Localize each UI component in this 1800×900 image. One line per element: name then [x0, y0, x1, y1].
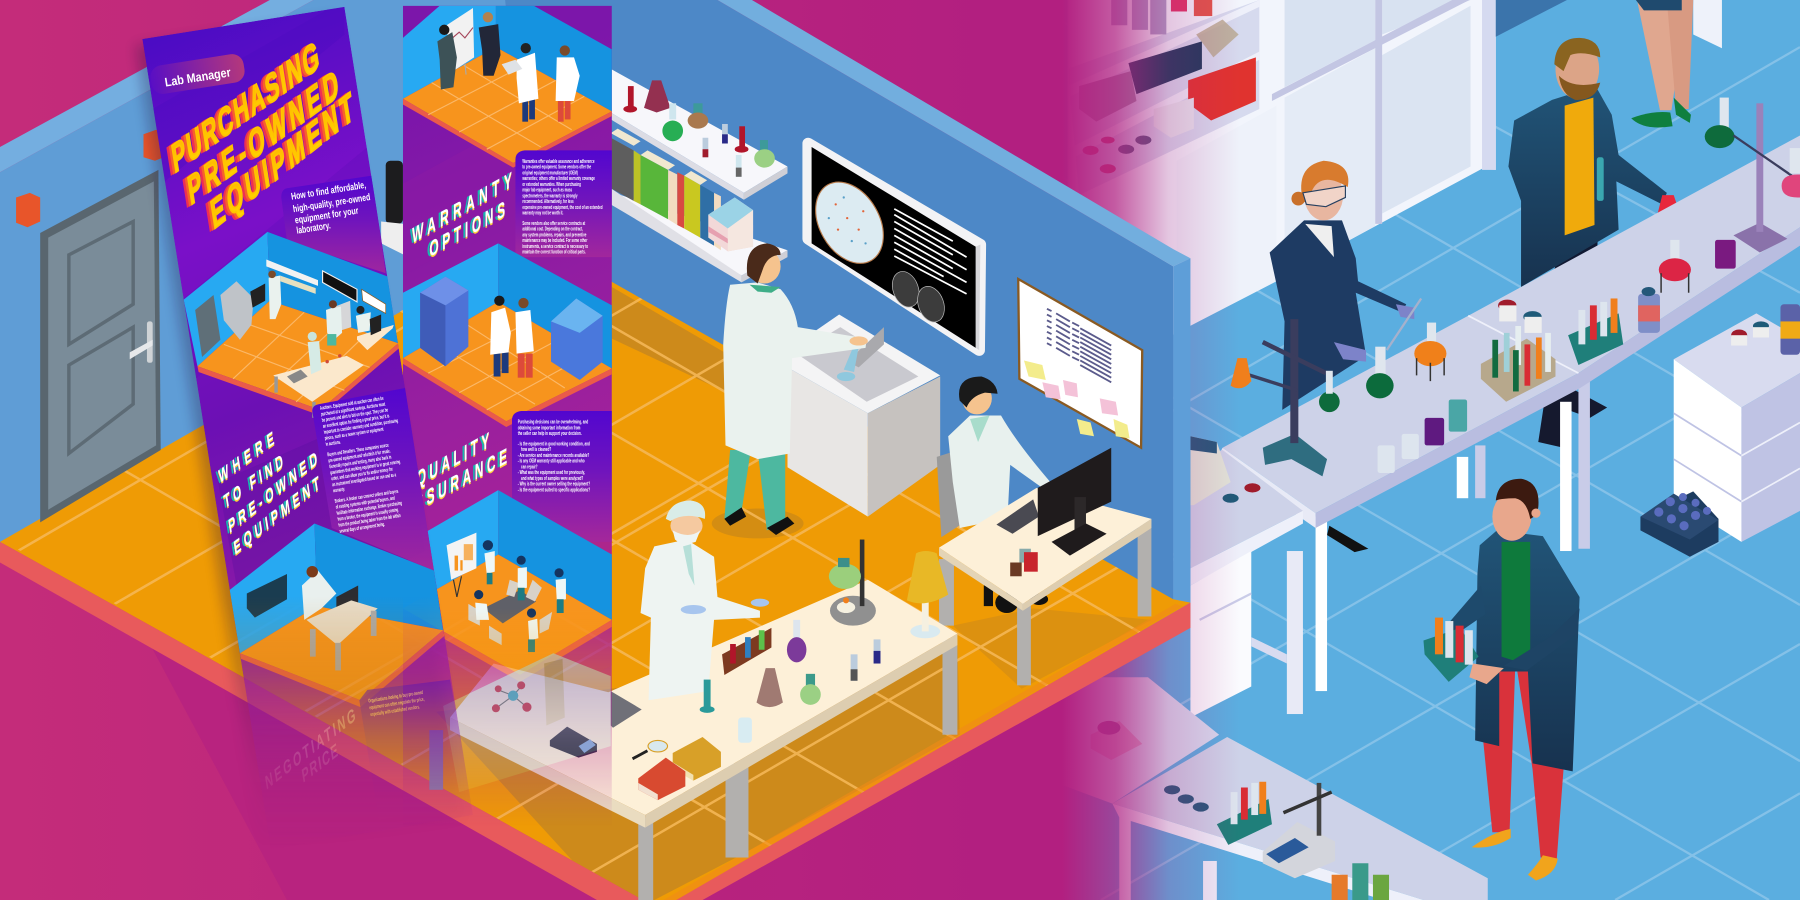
purple ring stand with flasks: [1705, 98, 1800, 253]
left wall ridge: [0, 0, 313, 172]
teal stand: [700, 680, 715, 713]
magnifier: [633, 740, 668, 759]
heading: where to find pre-owned equipment: WHERE: [217, 428, 275, 488]
brochure page two: [401, 6, 612, 855]
panel: quality assurance text: - Is the equipment in good working condition, and: [518, 441, 590, 447]
panel: where to find text: from the product being taken from the lab within: [338, 512, 401, 528]
burner on stand: [829, 540, 876, 626]
panel: quality assurance text: - Is the equipment suited to specific applications?: [518, 486, 590, 493]
panel: quality assurance text: - Are service and maintenance records available?: [518, 452, 590, 458]
panel: warranty text: warranty may not be worth it.: [522, 210, 563, 216]
panel: where to find text: warranty.: [332, 486, 345, 494]
person: foreground man with test tube rack: [1423, 479, 1580, 880]
panel: subtitle: laboratory.: [296, 220, 332, 237]
ring stand with flasks: [1231, 319, 1340, 476]
heading: warranty options: WARRANTY: [412, 168, 512, 250]
heading: where to find pre-owned equipment: PRE-OWNED: [225, 450, 316, 539]
panel: where to find text: Generally repairs and testing, many also back in: [329, 454, 392, 470]
heading: negotiating price: PRICE: [301, 740, 339, 787]
heading: quality assurance: [418, 432, 507, 506]
title: PRE-OWNED: [181, 63, 337, 216]
panel: warranty text: warranties; others offer a limited warranty coverage: [522, 175, 595, 181]
panel: quality assurance text: the seller can help in support your decision.: [518, 430, 582, 436]
heading: warranty options: OPTIONS: [427, 198, 503, 263]
panel: quality assurance text: [512, 411, 612, 542]
heading: negotiating price: NEGOTIATING: [264, 705, 357, 794]
door: [40, 170, 161, 522]
heading: quality assurance: QUALITY: [417, 428, 489, 492]
panel: warranty text: expensive pre-owned equipment, the cost of an extended: [522, 204, 603, 210]
long lab table: [429, 580, 957, 900]
panel: where to find text: purchased at a significant savings. Auctions must: [320, 401, 386, 417]
panel: warranty text: instruments, a service contract is necessary to: [522, 243, 588, 249]
heading: quality assurance: ASSURANCE: [403, 445, 507, 524]
heading: where to find pre-owned equipment: PRE-OWNED: [227, 450, 319, 540]
table glassware: [550, 540, 948, 800]
heading: where to find pre-owned equipment: TO FIND: [223, 451, 284, 513]
left wall: [0, 0, 608, 545]
panel: where to find text: Buyers and Resellers. These companies source: [327, 442, 389, 458]
stacked books: [708, 197, 753, 251]
title: EQUIPMENT: [208, 83, 356, 238]
panel: where to find text: guarantees that working equipment is in great running: [330, 458, 401, 476]
logo pill: [152, 54, 245, 94]
panel: where to find text: an excellent option for finding a great price, but it is: [322, 412, 390, 429]
floor: [0, 282, 1190, 900]
panel: quality assurance text: - Is any OEM warranty still applicable and who: [518, 458, 585, 464]
panel: warranty text: maintenance may be included. For some other: [522, 237, 588, 243]
panel: where to find text: from a broker, the equipment is usually coming: [337, 506, 399, 522]
panel: warranty text: major lab equipment, such as mass: [522, 187, 573, 193]
panel: warranty text: Warranties offer valuable assurance and adherence: [522, 158, 595, 164]
panel: where to find text: pieces, such as a newer system or equipment: [324, 426, 384, 441]
room: storage: [403, 243, 612, 427]
heading: warranty options: WARRANTY: [410, 167, 510, 249]
panel: where to find text: Auctions. Equipment sold at auction can often be: [319, 395, 384, 411]
tube racks on bench: [1481, 326, 1555, 402]
molecule icon: [492, 681, 532, 712]
room: faded lower scene: [443, 653, 611, 792]
floor platform edges: [0, 542, 1190, 900]
heading: warranty options: OPTIONS: [429, 197, 505, 262]
right lab scene: [1033, 0, 1800, 900]
wall end cap: [1173, 258, 1190, 611]
panel: where to find text: in auctions.: [325, 439, 341, 447]
person: woman in navy with goggles: [1270, 161, 1421, 552]
panel: where to find text: be present and alert to bid on the spot. They can be: [321, 406, 389, 423]
purple flask: [787, 620, 806, 662]
heading: warranty options: WARRANTY: [412, 166, 512, 248]
beaker: [738, 717, 752, 743]
panel: warranty text: original equipment manufacturer (OEM): [522, 170, 578, 176]
title: EQUIPMENT: [206, 84, 354, 239]
panel: subtitle: equipment for your: [294, 206, 359, 227]
panel: subtitle: [281, 176, 386, 273]
heading: where to find pre-owned equipment: WHERE: [215, 429, 273, 489]
panel: warranty text: spectrometers, the warranty is strongly: [522, 193, 578, 199]
panel: negotiating text: especially with established vendors.: [370, 703, 420, 717]
panel: negotiating text: Organizations looking to buy pre-owned: [368, 689, 424, 704]
laptop keyboard: [611, 691, 642, 728]
panel: negotiating text: [359, 680, 466, 770]
orange flask on tripod: [1414, 323, 1446, 381]
sink cabinet: [788, 315, 940, 517]
heading: where to find pre-owned equipment: WHERE: [217, 430, 275, 490]
blue lab floor: [1033, 0, 1800, 900]
central isometric room: [0, 0, 1190, 900]
panel: warranty text: to pre-owned equipment. Some vendors offer the: [522, 164, 592, 170]
panel: warranty text: recommended. Alternatively, for less: [522, 198, 574, 204]
back cabinets: [1068, 0, 1722, 390]
panel: warranty text: [515, 150, 612, 257]
green jar: [800, 674, 821, 705]
panel: warranty text: additional cost. Depending on the contract,: [522, 226, 583, 232]
whiteboard: [1018, 279, 1142, 448]
heading: where to find pre-owned equipment: TO FIND: [220, 452, 282, 514]
green flask: [1366, 347, 1394, 398]
title: [166, 43, 352, 232]
back wall: [505, 0, 1173, 608]
heading: quality assurance: ASSURANCE: [401, 445, 505, 524]
lower shelf with books: [611, 129, 788, 282]
panel: where to find text: several days of arrangement being.: [339, 521, 385, 534]
test tube rack: [722, 628, 771, 675]
panel: where to find text: of existing systems with potential buyers, and: [335, 494, 396, 510]
shelving with instruments: [1068, 0, 1259, 195]
title: PRE-OWNED: [185, 61, 341, 214]
logo pill: Lab Manager: [164, 65, 232, 90]
panel: subtitle: How to find affordable,: [290, 180, 367, 203]
heading: warranty options: OPTIONS: [429, 198, 505, 264]
heading: where to find pre-owned equipment: PRE-OWNED: [227, 448, 319, 538]
heading: where to find pre-owned equipment: [215, 428, 321, 561]
teal rack: [1568, 298, 1623, 365]
beakers: [1378, 300, 1542, 473]
panel: where to find text: facilitate information exchange. Broker purchasing: [336, 499, 403, 516]
vials: [851, 639, 880, 681]
books: [638, 737, 721, 800]
yellow lamp: [907, 551, 948, 638]
panel: where to find text: [312, 388, 434, 571]
left drawer bench: [1190, 436, 1303, 717]
room: office: [230, 523, 444, 707]
heading: where to find pre-owned equipment: TO FIND: [223, 453, 284, 515]
bench tables: [1217, 135, 1800, 691]
room: main laboratory: [184, 232, 399, 418]
bench items: flasks and test tube racks: [1231, 98, 1800, 476]
panel: warranty text: any system problems, repairs, and preventive: [522, 232, 587, 238]
heading: quality assurance: QUALITY: [417, 429, 489, 493]
heading: quality assurance: ASSURANCE: [403, 444, 507, 523]
bottom benches: [1050, 677, 1488, 900]
brochure shadow: [132, 40, 450, 784]
battery crate: [1640, 491, 1718, 557]
person: blue coat man with yellow shirt: [1508, 38, 1683, 448]
person: seated scientist at computer: [937, 377, 1050, 613]
panel: quality assurance text: obtaining some important information from: [518, 424, 581, 431]
panel: warranty text: or extended warranties. When purchasing: [522, 181, 581, 187]
panel: subtitle: high-quality, pre-owned: [292, 192, 371, 215]
fade from lab scene into magenta: [1022, 0, 1263, 900]
panel: quality assurance text: and what types of samples were analyzed?: [521, 475, 584, 481]
panel: quality assurance text: Purchasing decisions can be overwhelming, and: [518, 419, 588, 425]
title: PURCHASING: [167, 34, 319, 183]
orange wall box right: [143, 130, 166, 161]
panel: where to find text: important to consider warranty and condition, purchasing: [323, 417, 399, 435]
panel: warranty text: maintain the correct function of critical parts.: [522, 249, 586, 255]
panel: where to find text: an instrument investigated based on use and as a: [332, 471, 397, 488]
brown flask: [757, 668, 783, 707]
panel: quality assurance text: can repair?: [521, 463, 538, 470]
heading: quality assurance: QUALITY: [414, 429, 487, 493]
back wall ridge: [717, 0, 1190, 266]
panel: negotiating text: equipment can often negotiate the price,: [369, 696, 425, 711]
red flask on tripod: [1659, 240, 1691, 293]
panel: quality assurance text: how well is cleaned?: [521, 446, 551, 452]
wall screen: [802, 143, 980, 350]
heading: where to find pre-owned equipment: EQUIPMENT: [233, 473, 321, 560]
heading: where to find pre-owned equipment: EQUIPMENT: [230, 474, 319, 561]
title: PURCHASING: [169, 32, 322, 182]
room: presentation: [403, 6, 612, 168]
person: scientist with hairnet: [641, 501, 769, 700]
purple beaker: [1715, 240, 1736, 269]
person: standing scientist at sink: [723, 243, 868, 535]
orange wall box left: [16, 193, 40, 227]
blue bottle: [1638, 287, 1660, 333]
wall monitor behind brochure: [381, 161, 404, 255]
title: EQUIPMENT: [203, 85, 351, 240]
top standing person legs: [1631, 0, 1693, 128]
panel: where to find text: Brokers. A broker can connect sellers and buyers: [334, 488, 399, 504]
panel: where to find text: order, and can allow you to fix and/or money for: [331, 466, 393, 482]
title: PRE-OWNED: [183, 62, 339, 215]
panel: warranty text: Some vendors also offer service contracts at: [522, 220, 586, 226]
panel: quality assurance text: - What was the equipment used for previously,: [518, 469, 585, 475]
title: PURCHASING: [164, 35, 317, 184]
panel: quality assurance text: - Why is the current owner selling the equipment?: [518, 481, 590, 487]
panel: where to find text: pre-owned equipment and refurbish it for resale.: [328, 448, 391, 464]
right drawer unit: [1674, 304, 1800, 542]
room: meeting: [428, 490, 612, 682]
phone: [550, 727, 597, 758]
brochure page one: [142, 0, 473, 849]
desk with computer: [939, 448, 1151, 685]
upper shelf with glassware: [611, 69, 788, 200]
heading: where to find pre-owned equipment: EQUIPMENT: [233, 475, 321, 561]
